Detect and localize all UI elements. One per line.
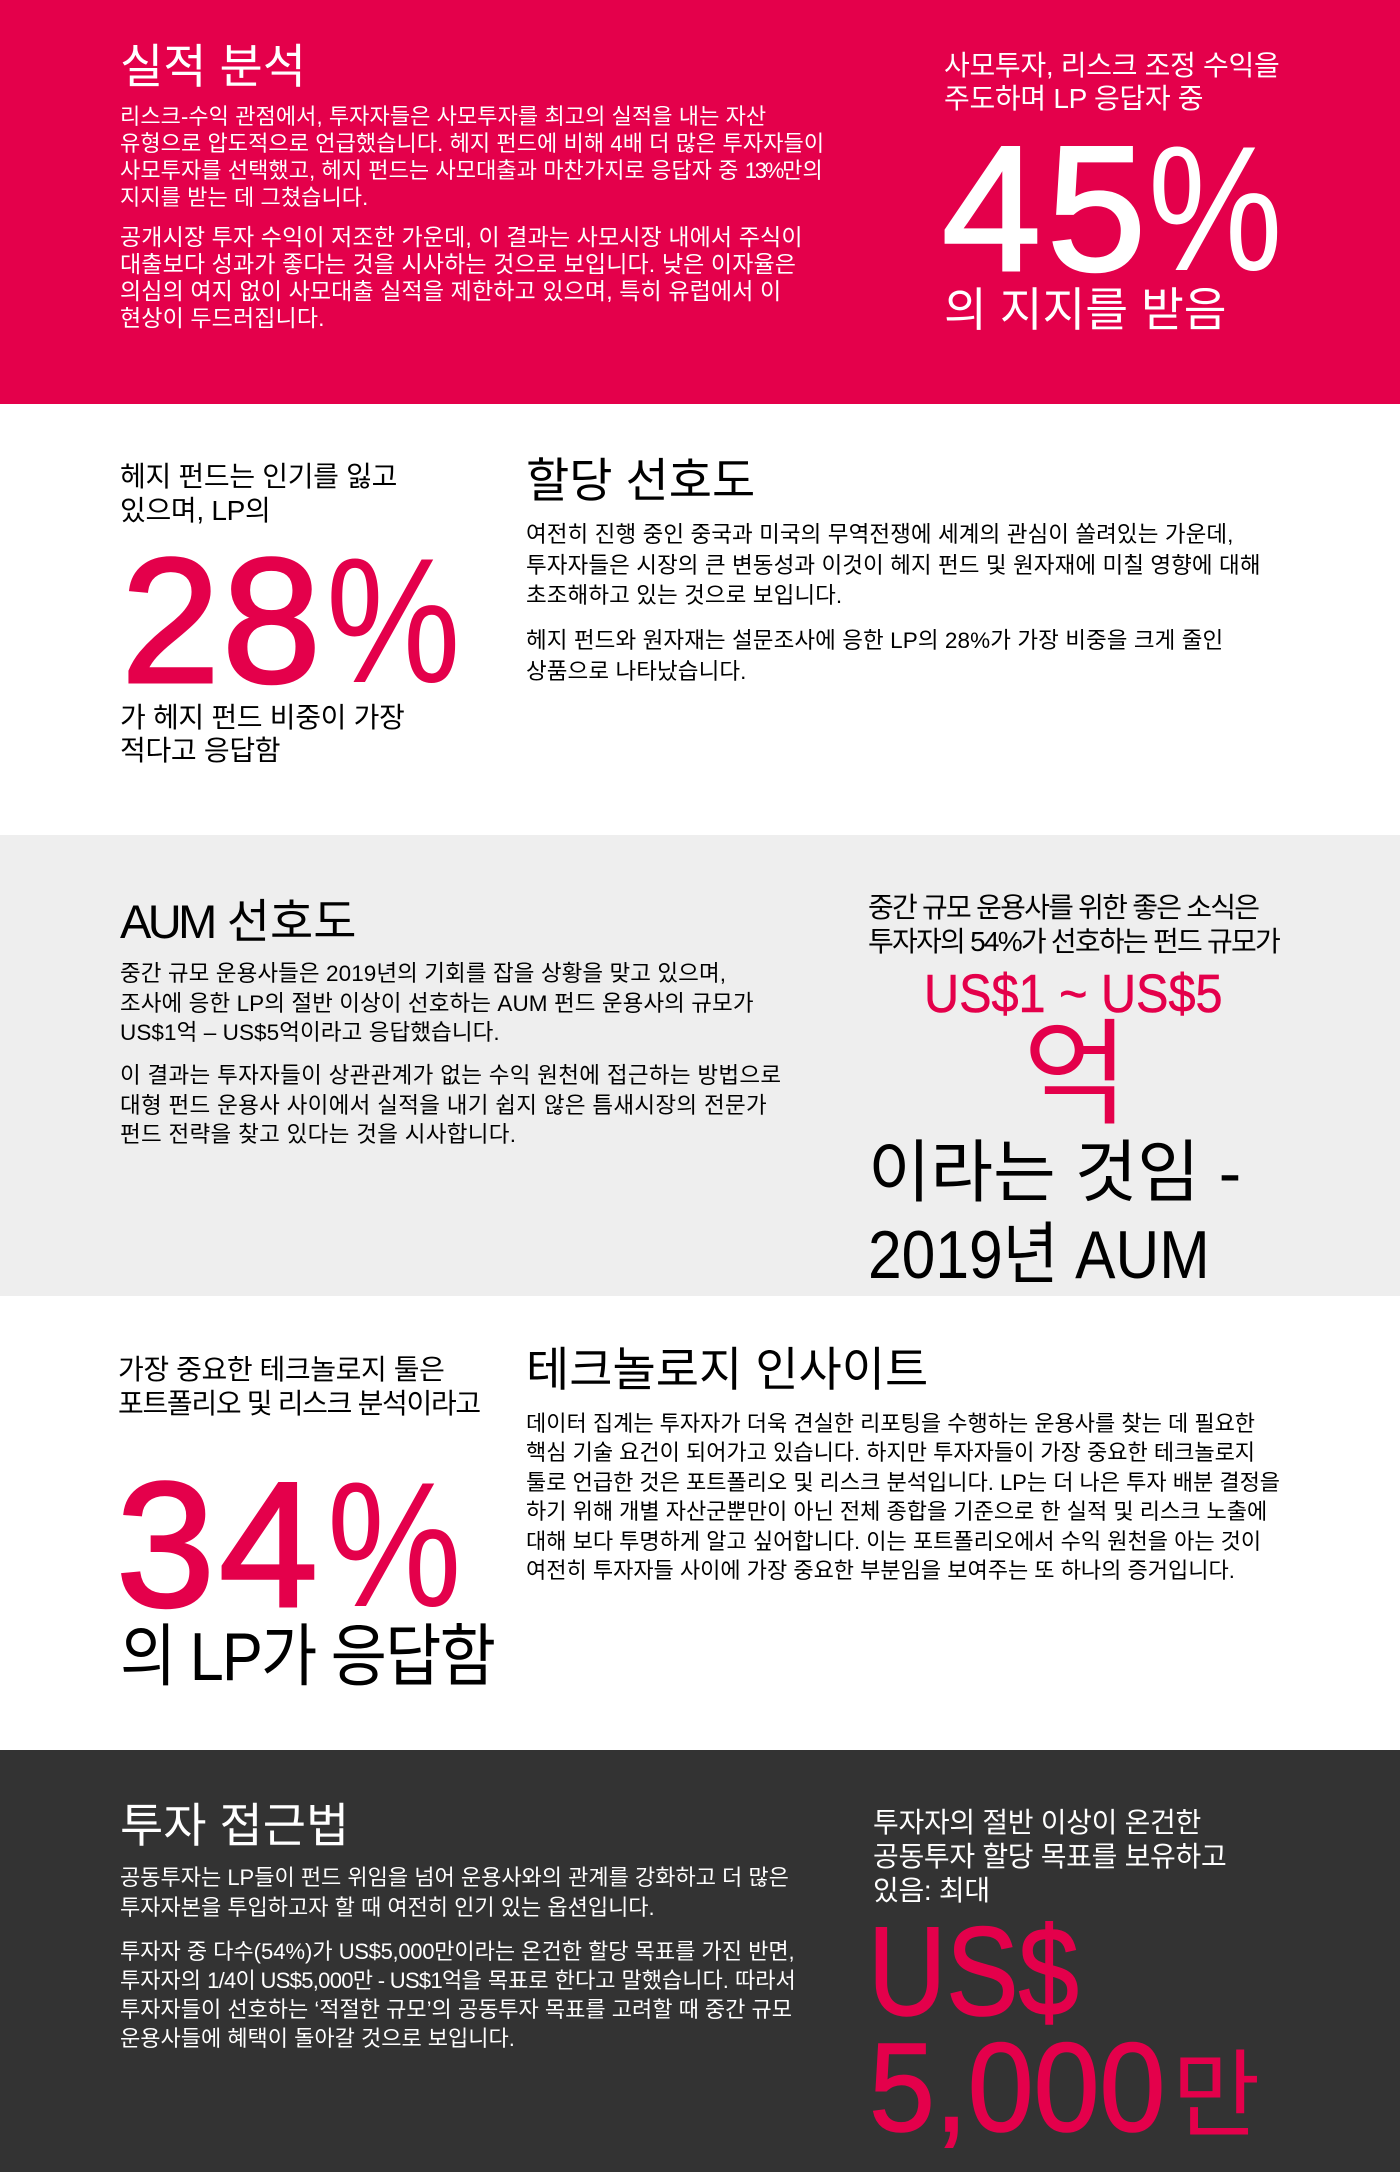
text block: technology body: 툴로 언급한 것은 포트폴리오 및 리스크 분석입니다. LP는 더 나은 투자 배분 결정을 (526, 1470, 1280, 1495)
text block: performance body: 지지를 받는 데 그쳤습니다. (120, 185, 368, 210)
text block: approach body second paragraph (120, 1939, 796, 2051)
text block: performance body second paragraph (120, 224, 803, 331)
text block: technology body (526, 1411, 1280, 1583)
text block: allocation body: 투자자들은 시장의 큰 변동성과 이것이 헤지 펀드 및 원자재에 미칠 영향에 대해 (526, 552, 1261, 578)
text block: performance body second paragraph: 현상이 두드러집니다. (120, 305, 325, 331)
text block: allocation body second paragraph: 헤지 펀드와 원자재는 설문조사에 응한 LP의 28%가 가장 비중을 크게 줄인 (526, 628, 1223, 653)
heading: technology insights: 테크놀로지 인사이트 (526, 1343, 928, 1396)
callout: lowest allocation label: 적다고 응답함 (120, 735, 280, 766)
text block: performance body second paragraph: 대출보다 성과가 좋다는 것을 시사하는 것으로 보입니다. 낮은 이자율은 (120, 251, 796, 277)
text block: approach body (120, 1865, 789, 1920)
callout: good news for mid-size managers: 중간 규모 운용사를 위한 좋은 소식은 (868, 892, 1258, 923)
callout: most important tech tools: 가장 중요한 테크놀로지 툴은 (118, 1354, 444, 1385)
text block: AUM body: 조사에 응한 LP의 절반 이상이 선호하는 AUM 펀드 운용사의 규모가 (120, 990, 754, 1016)
callout: eok label and year: 2019년 AUM (868, 1217, 1210, 1293)
heading: AUM preference: AUM 선호도 (120, 895, 356, 948)
text block: performance body: 사모투자를 선택했고, 헤지 펀드는 사모대출과 마찬가지로 응답자 중 13%만의 (120, 158, 823, 183)
callout: good news for mid-size managers: 투자자의 54%가 선호하는 펀드 규모가 (868, 926, 1279, 957)
big number: US$: US$ (868, 1901, 1079, 2042)
panel: performance analysis (0, 0, 1400, 404)
big number: 28% (121, 521, 461, 720)
text block: approach body: 투자자본을 투입하고자 할 때 여전히 인기 있는 옵션입니다. (120, 1894, 655, 1920)
callout: LP response label: 의 LP가 응답함 (120, 1619, 494, 1695)
text block: AUM body (120, 961, 754, 1045)
big number: US$1 ~ US$5: US$1 ~ US$5 (924, 964, 1223, 1024)
big number: 34%: % (327, 1445, 462, 1644)
text block: performance body (120, 104, 824, 210)
callout: conservative co-investment target: 있음: 최대 (873, 1875, 990, 1906)
callout: hedge funds losing favour: 헤지 펀드는 인기를 잃고 (120, 461, 397, 492)
text block: AUM body second paragraph (120, 1063, 781, 1147)
text block: AUM body second paragraph: 대형 펀드 운용사 사이에서 실적을 내기 쉽지 않은 틈새시장의 전문가 (120, 1092, 767, 1118)
heading: investment approach: 투자 접근법 (120, 1799, 349, 1852)
callout: private equity lead: 주도하며 LP 응답자 중 (944, 83, 1203, 114)
text block: allocation body (526, 522, 1261, 608)
text block: allocation body second paragraph: 상품으로 나타났습니다. (526, 659, 746, 684)
big number: 45%: % (1148, 109, 1283, 308)
heading: allocation preference: 할당 선호도 (526, 454, 755, 507)
callout: most important tech tools: 포트폴리오 및 리스크 분석이라고 (118, 1388, 480, 1419)
callout: private equity lead (944, 50, 1279, 114)
text block: performance body second paragraph: 의심의 여지 없이 사모대출 실적을 제한하고 있으며, 특히 유럽에서 이 (120, 278, 781, 304)
text block: approach body: 공동투자는 LP들이 펀드 위임을 넘어 운용사와의 관계를 강화하고 더 많은 (120, 1865, 789, 1890)
callout: most important tech tools (118, 1354, 480, 1419)
callout: support label: 의 지지를 받음 (944, 284, 1227, 336)
text block: allocation body: 초조해하고 있는 것으로 보입니다. (526, 583, 842, 608)
text block: performance body: 리스크-수익 관점에서, 투자자들은 사모투자를 최고의 실적을 내는 자산 (120, 104, 766, 129)
big number: 34%: 34 (116, 1445, 322, 1644)
panel: AUM preference (0, 835, 1400, 1296)
big number: 28%: % (326, 521, 461, 720)
text block: AUM body: US$1억 – US$5억이라고 응답했습니다. (120, 1020, 500, 1045)
text block: AUM body second paragraph: 이 결과는 투자자들이 상관관계가 없는 수익 원천에 접근하는 방법으로 (120, 1063, 781, 1088)
text block: technology body: 핵심 기술 요건이 되어가고 있습니다. 하지만 투자자들이 가장 중요한 테크놀로지 (526, 1440, 1255, 1465)
callout: hedge funds losing favour: 있으며, LP의 (120, 495, 270, 526)
text block: AUM body second paragraph: 펀드 전략을 찾고 있다는 것을 시사합니다. (120, 1122, 516, 1147)
callout: eok label and year: 이라는 것임 - (868, 1135, 1241, 1211)
big number: 34% (116, 1445, 462, 1644)
text block: approach body second paragraph: 투자자 중 다수(54%)가 US$5,000만이라는 온건한 할당 목표를 가진 반면, (120, 1939, 795, 1964)
text block: AUM body: 중간 규모 운용사들은 2019년의 기회를 잡을 상황을 맞고 있으며, (120, 961, 726, 986)
text block: technology body: 여전히 투자자들 사이에 가장 중요한 부분임을 보여주는 또 하나의 증거입니다. (526, 1558, 1235, 1583)
big number: 45%: 45 (942, 109, 1152, 308)
text block: allocation body second paragraph (526, 628, 1223, 684)
callout: conservative co-investment target (873, 1807, 1226, 1906)
callout: eok label and year (868, 1135, 1241, 1293)
panel: allocation preference (0, 404, 1400, 835)
big number: eok: 억 (1023, 1011, 1129, 1139)
text block: performance body second paragraph: 공개시장 투자 수익이 저조한 가운데, 이 결과는 사모시장 내에서 주식이 (120, 224, 803, 250)
callout: conservative co-investment target: 공동투자 할당 목표를 보유하고 (873, 1841, 1226, 1872)
callout: good news for mid-size managers (868, 892, 1280, 957)
callout: lowest allocation label (120, 702, 405, 766)
text block: technology body: 대해 보다 투명하게 알고 싶어합니다. 이는 포트폴리오에서 수익 원천을 아는 것이 (526, 1529, 1261, 1554)
text block: technology body: 하기 위해 개별 자산군뿐만이 아닌 전체 종합을 기준으로 한 실적 및 리스크 노출에 (526, 1499, 1267, 1524)
big number: 45% (942, 109, 1283, 308)
text block: performance body: 유형으로 압도적으로 언급했습니다. 헤지 펀드에 비해 4배 더 많은 투자자들이 (120, 131, 824, 156)
panel: investment approach (0, 1750, 1400, 2172)
text block: approach body second paragraph: 운용사들에 혜택이 돌아갈 것으로 보입니다. (120, 2026, 515, 2051)
callout: lowest allocation label: 가 헤지 펀드 비중이 가장 (120, 702, 405, 733)
panel: technology insights (0, 1296, 1400, 1750)
text block: technology body: 데이터 집계는 투자자가 더욱 견실한 리포팅을 수행하는 운용사를 찾는 데 필요한 (526, 1411, 1255, 1436)
big number: 28%: 28 (121, 521, 323, 720)
text block: allocation body: 여전히 진행 중인 중국과 미국의 무역전쟁에 세계의 관심이 쏠려있는 가운데, (526, 522, 1234, 547)
text block: approach body second paragraph: 투자자의 1/4이 US$5,000만 - US$1억을 목표로 한다고 말했습니다. 따라서 (120, 1968, 796, 1993)
callout: hedge funds losing favour (120, 461, 397, 526)
callout: conservative co-investment target: 투자자의 절반 이상이 온건한 (873, 1807, 1201, 1838)
big number: 50 million: 만 (1172, 2043, 1260, 2150)
heading: performance analysis: 실적 분석 (120, 40, 306, 93)
big number: 50 million: 5,000 (869, 2017, 1165, 2158)
callout: private equity lead: 사모투자, 리스크 조정 수익을 (944, 50, 1279, 81)
text block: approach body second paragraph: 투자자들이 선호하는 ‘적절한 규모’의 공동투자 목표를 고려할 때 중간 규모 (120, 1997, 792, 2022)
